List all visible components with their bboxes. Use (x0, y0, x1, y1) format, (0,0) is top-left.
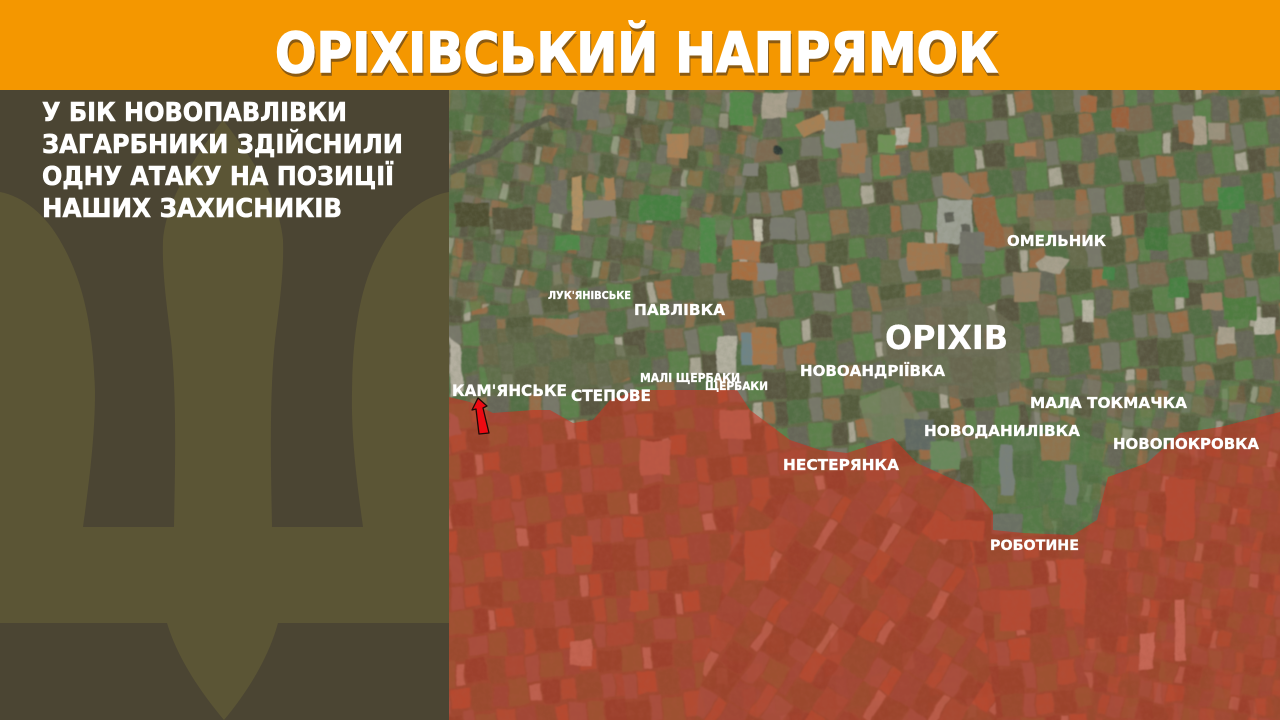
title bar (0, 0, 1280, 90)
map labels (452, 232, 1259, 554)
map labels: НОВОАНДРІЇВКА (800, 361, 945, 380)
map labels: МАЛІ ЩЕРБАКИ (640, 371, 740, 385)
map labels: КАМ'ЯНСЬКЕ (452, 381, 567, 400)
map labels: ПАВЛІВКА (634, 301, 725, 319)
map labels: ЩЕРБАКИ (705, 379, 768, 393)
arrow: red attack arrow (472, 398, 489, 434)
panel text: У БІК НОВОПАВЛІВКИ (42, 98, 347, 128)
map: satellite fields (430, 80, 1280, 720)
map labels: МАЛА ТОКМАЧКА (1030, 394, 1187, 412)
panel text: НАШИХ ЗАХИСНИКІВ (42, 194, 342, 224)
title: ОРІХІВСЬКИЙ НАПРЯМОК (275, 20, 998, 85)
panel: left background with trident (0, 90, 449, 720)
red occupied zone overlay (449, 390, 1280, 720)
map labels: НОВОПОКРОВКА (1113, 435, 1259, 453)
map labels: ОРІХІВ (885, 318, 1008, 357)
trident emblem (0, 120, 449, 720)
map labels: НОВОДАНИЛІВКА (924, 422, 1080, 440)
panel text: ЗАГАРБНИКИ ЗДІЙСНИЛИ (42, 128, 403, 160)
panel text: ОДНУ АТАКУ НА ПОЗИЦІЇ (42, 160, 394, 192)
map labels: ЛУК'ЯНІВСЬКЕ (548, 290, 631, 302)
map labels: ОМЕЛЬНИК (1007, 232, 1107, 250)
panel text (42, 98, 403, 224)
map labels: РОБОТИНЕ (990, 538, 1079, 554)
map labels: НЕСТЕРЯНКА (783, 456, 899, 474)
map labels: СТЕПОВЕ (571, 386, 651, 405)
